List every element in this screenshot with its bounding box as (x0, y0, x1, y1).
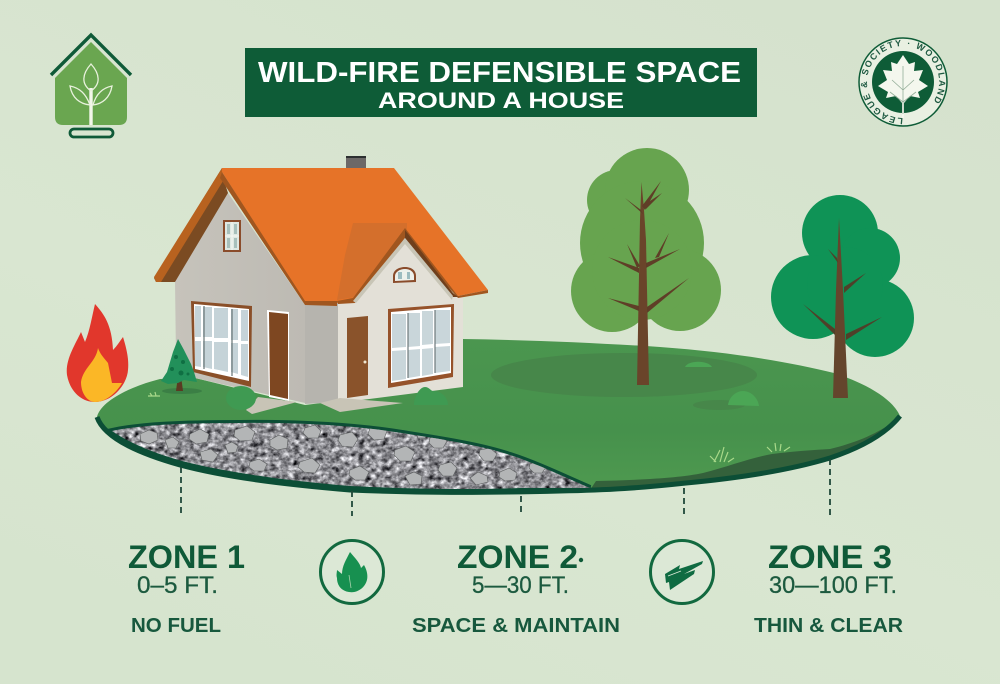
logo: house with plant (51, 35, 131, 137)
grass tufts (148, 392, 790, 462)
zone 3 label: 30—100 FT. (769, 572, 897, 599)
gravel zone (108, 420, 592, 490)
dashed zone markers (181, 459, 830, 516)
right window (388, 304, 454, 388)
roof (220, 168, 488, 306)
zone 2 label: 5—30 FT. (472, 572, 569, 599)
upper window (223, 220, 241, 252)
right door (347, 316, 368, 398)
front walkway (246, 397, 403, 414)
lawn shadow patch (491, 353, 757, 397)
zone 3 label: THIN & CLEAR (754, 615, 904, 637)
lawn disc (97, 339, 900, 492)
oval window (393, 267, 416, 283)
logo: leaf seal: LEAGUE & SOCIETY · WOODLAND (860, 40, 946, 124)
left door (267, 310, 289, 401)
title banner: WILD-FIRE DEFENSIBLE SPACE (258, 57, 741, 89)
left wall (175, 193, 305, 403)
icon: flame badge (320, 540, 384, 604)
house (154, 156, 488, 404)
title banner (245, 48, 757, 117)
lawn side and rim (97, 416, 900, 492)
zone 2 label (412, 539, 620, 637)
tree 1 crown: light green (571, 148, 721, 332)
zone 3 label (754, 539, 904, 637)
zone 2 label: ZONE 2 (457, 539, 578, 575)
zone 1 label: ZONE 1 (128, 539, 245, 575)
infographic canvas (50, 32, 948, 632)
chimney (346, 156, 366, 169)
tree 2 trunk (803, 218, 882, 398)
small fir tree (161, 339, 202, 394)
tree 2 crown: dark green (771, 195, 914, 357)
zone 1 label: 0–5 FT. (137, 572, 218, 599)
shrubs (226, 362, 759, 410)
gravel stones (140, 425, 546, 485)
zone 1 label: NO FUEL (131, 615, 221, 637)
left window (191, 301, 252, 387)
middle wall (305, 302, 338, 404)
tree 1 trunk and branches (608, 181, 689, 385)
title banner: AROUND A HOUSE (378, 88, 624, 113)
zone 3 label: ZONE 3 (768, 539, 892, 575)
icon: pruning tool badge (650, 540, 714, 604)
left gable eave (154, 168, 228, 282)
zone 2 label: SPACE & MAINTAIN (412, 615, 620, 637)
zone 1 label (128, 539, 245, 637)
flame (67, 304, 128, 402)
right wall (338, 237, 463, 403)
